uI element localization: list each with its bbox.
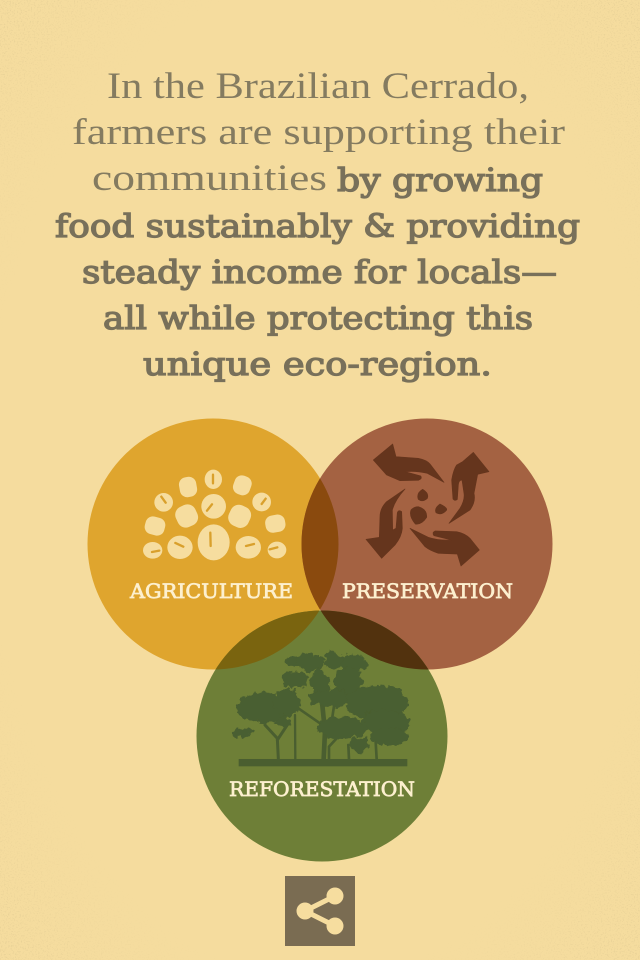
hand right [449, 452, 489, 523]
circle: agriculture [88, 418, 338, 670]
tall tree canopy [281, 671, 309, 688]
hand bottom [410, 528, 479, 566]
label: preservation: PRESERVATION [342, 579, 513, 603]
ground bar [239, 759, 407, 766]
icon: soybeans [143, 470, 287, 560]
heading line 7 bold: unique eco-region. [143, 345, 492, 383]
trunks [265, 688, 377, 759]
low tree canopy [316, 718, 368, 739]
overlap: agriculture and preservation [302, 478, 338, 610]
label: reforestation: REFORESTATION [229, 777, 415, 801]
canopies [233, 652, 410, 752]
share button [285, 876, 355, 946]
left tree canopy [237, 693, 293, 723]
heading line 3 regular: communities [92, 158, 327, 199]
seeds [410, 489, 447, 524]
icon: share [296, 888, 344, 934]
heading line 1: In the Brazilian Cerrado, [107, 66, 529, 107]
heading line 6 bold: all while protecting this [103, 299, 533, 337]
heading line 2: farmers are supporting their [72, 112, 565, 153]
overlap: preservation and reforestation [320, 610, 428, 670]
heading line 3 bold: by growing [337, 161, 543, 199]
icon: trees [233, 652, 410, 766]
icon: hands [366, 444, 489, 566]
heading line 4 bold: food sustainably & providing [55, 207, 580, 245]
venn diagram [88, 418, 552, 862]
right tree canopy [345, 685, 409, 720]
circle: reforestation [196, 610, 448, 862]
heading line 5 bold: steady income for locals— [82, 253, 557, 291]
label: agriculture: AGRICULTURE [129, 579, 293, 603]
heading text [55, 66, 580, 383]
circle: preservation [302, 418, 552, 670]
hand left [366, 489, 405, 558]
hand top [373, 444, 444, 482]
overlap: agriculture and reforestation [216, 610, 320, 670]
